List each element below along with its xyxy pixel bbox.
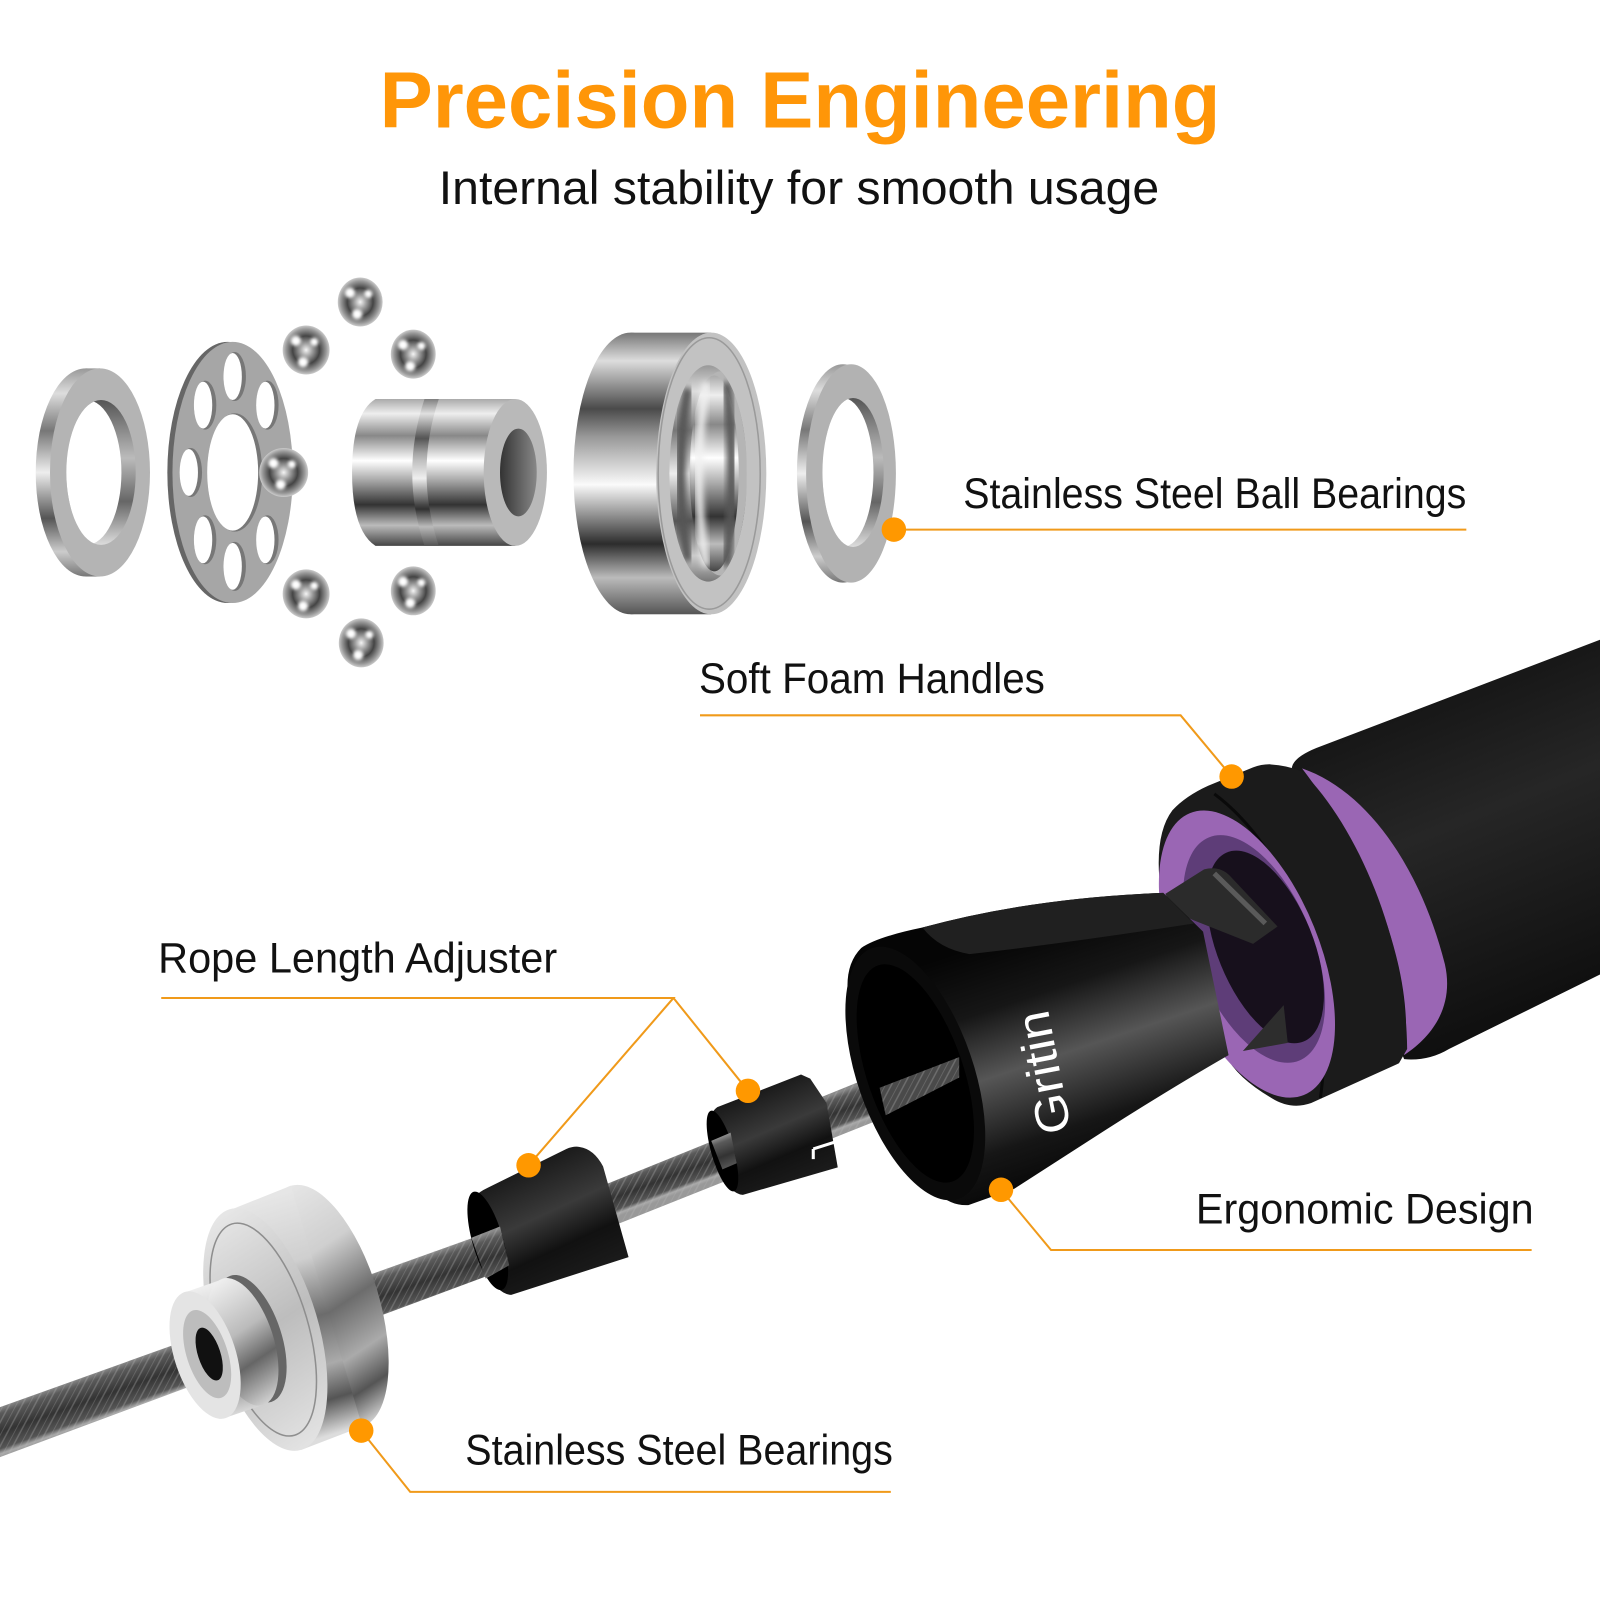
rope length adjuster sleeve small — [700, 1074, 839, 1195]
label: soft foam handles — [699, 655, 1244, 789]
foam handle with purple ring and collar — [1123, 640, 1600, 1122]
purple face — [1123, 786, 1371, 1122]
retainer plate with holes — [167, 342, 293, 603]
ergonomic end cap — [817, 893, 1229, 1218]
stainless steel bearing on rope — [155, 1171, 413, 1465]
inner race cylinder — [352, 399, 547, 546]
label: rope length adjuster — [158, 934, 760, 1178]
label: stainless steel ball bearings — [882, 470, 1466, 542]
rope length adjuster sleeve large — [459, 1147, 629, 1295]
label: soft foam handles: Soft Foam Handles — [699, 655, 1045, 703]
purple ring — [1302, 768, 1447, 1055]
brand name: Gritin — [1006, 1007, 1081, 1139]
collar — [1159, 764, 1407, 1106]
subtitle: Internal stability for smooth usage — [439, 162, 1159, 214]
wire rope — [0, 1073, 880, 1457]
left washer — [36, 368, 150, 577]
title: Precision Engineering — [380, 56, 1220, 145]
label: ergonomic design: Ergonomic Design — [1196, 1185, 1534, 1233]
label: stainless steel bearings: Stainless Steel Bearings — [465, 1426, 893, 1474]
label: ergonomic design — [989, 1178, 1534, 1250]
foam grip — [1292, 640, 1600, 1059]
label: rope length adjuster: Rope Length Adjuster — [158, 934, 557, 982]
label: stainless steel ball bearings: Stainless Steel Ball Bearings — [963, 470, 1466, 518]
large bearing — [573, 333, 766, 614]
steel balls — [259, 278, 436, 667]
label: stainless steel bearings — [349, 1418, 893, 1492]
exploded ball bearing assembly — [36, 278, 896, 667]
right washer — [797, 364, 896, 583]
